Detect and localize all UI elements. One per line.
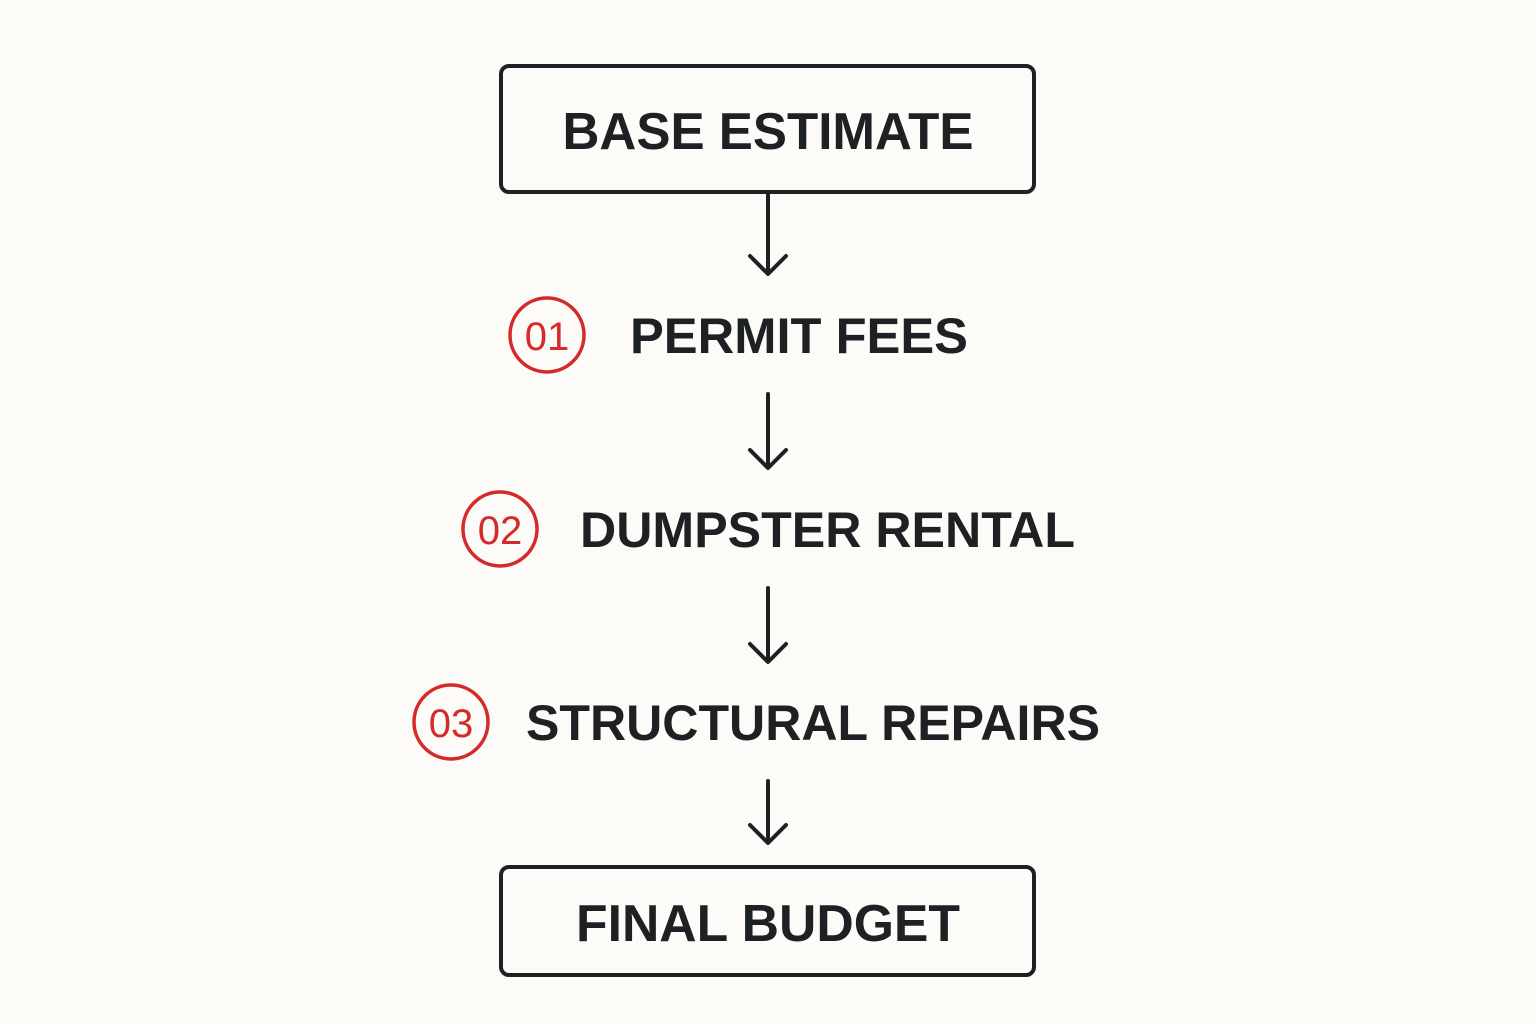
step 01: permit fees: [510, 298, 968, 372]
icon: circle 03: [414, 685, 488, 759]
arrow 3: [750, 588, 786, 662]
box: final budget: [501, 867, 1034, 975]
arrow 1: [750, 194, 786, 274]
icon: circle 01: 01: [525, 315, 569, 359]
step 02: dumpster rental: [463, 492, 1075, 566]
step 02: dumpster rental: DUMPSTER RENTAL: [580, 502, 1075, 558]
step 03: structural repairs: [414, 685, 1100, 759]
icon: circle 01: [510, 298, 584, 372]
step 03: structural repairs: STRUCTURAL REPAIRS: [526, 695, 1100, 751]
box: base estimate: [501, 66, 1034, 192]
arrow 2: [750, 394, 786, 468]
icon: circle 03: 03: [429, 702, 473, 746]
arrow 4: [750, 781, 786, 843]
icon: circle 02: [463, 492, 537, 566]
step 01: permit fees: PERMIT FEES: [630, 308, 968, 364]
icon: circle 02: 02: [478, 509, 522, 553]
box: base estimate: BASE ESTIMATE: [562, 103, 974, 161]
box: final budget: FINAL BUDGET: [576, 895, 960, 953]
